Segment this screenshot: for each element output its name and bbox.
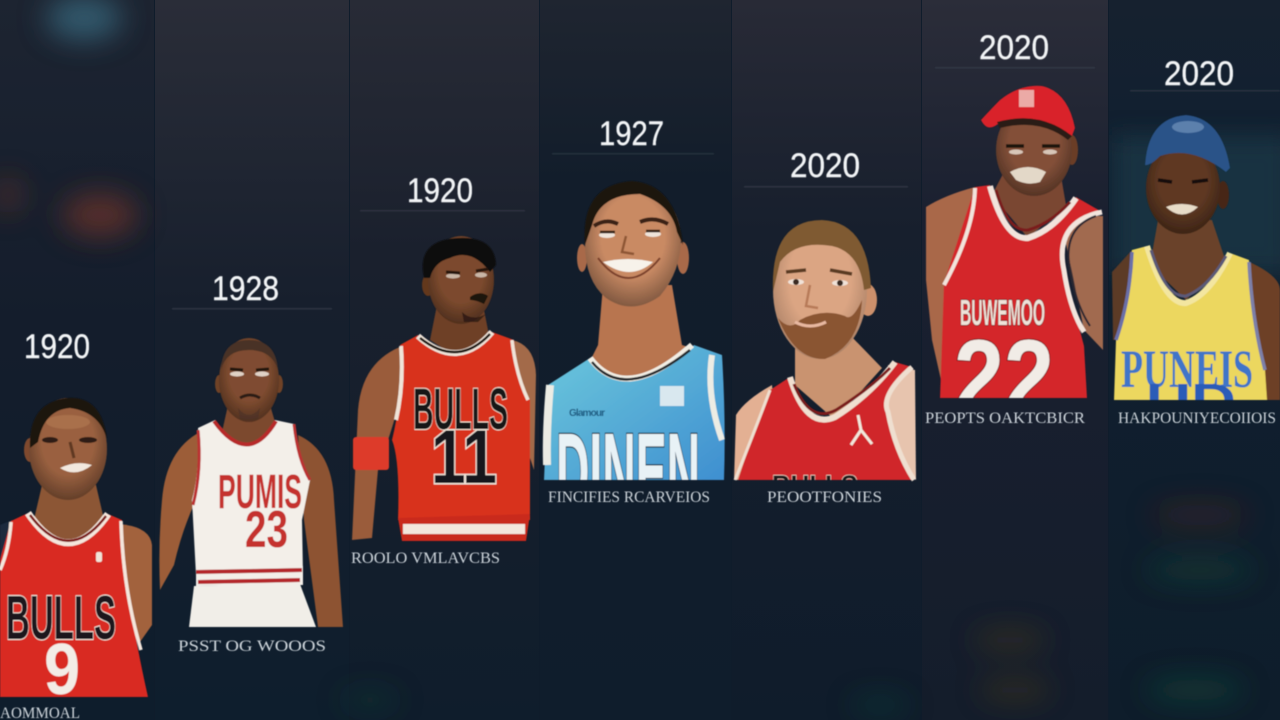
column 3: player in Bulls jersey and wristband: [351, 172, 536, 567]
name caption: PEOPTS OAKTCBICR: [925, 410, 1085, 427]
figure: 11: [431, 415, 497, 500]
figure: BULLS: [772, 470, 858, 503]
column 1: player in red jersey: [0, 328, 152, 720]
year label 2020: 2020: [979, 29, 1049, 67]
divider under year: [172, 308, 332, 310]
column 2: player in white jersey: [159, 270, 343, 655]
figure: [1112, 115, 1280, 426]
year label 1920: 1920: [24, 328, 90, 366]
divider under year: [360, 210, 525, 212]
column 7: player in blue cap and yellow jersey: [1112, 55, 1280, 427]
textured backdrop behind player seven: [1112, 135, 1280, 275]
figure: BULLS: [6, 584, 116, 653]
column 6: player in red cap and number 22 jersey: [925, 29, 1103, 435]
figure: PUMIS: [218, 466, 302, 519]
year label 1920: 1920: [407, 172, 473, 210]
column 4: smiling player in blue jersey: [544, 115, 725, 534]
figure: 9: [44, 630, 80, 710]
figure: BULLS: [413, 377, 508, 442]
year label 1927: 1927: [599, 115, 664, 153]
name caption: HAKPOUNIYECOIIOIS: [1118, 410, 1276, 427]
name caption: FINCIFIES RCARVEIOS: [548, 489, 710, 506]
divider under year: [935, 67, 1095, 68]
divider under year: [1130, 90, 1280, 92]
text: DINEN: [556, 411, 700, 534]
figure: [926, 86, 1103, 435]
name caption: PSST OG WOOOS: [178, 638, 326, 655]
year label 2020: 2020: [1164, 55, 1234, 93]
figure: [0, 398, 152, 710]
figure: [734, 220, 916, 503]
figure: 22: [954, 319, 1054, 435]
name caption: ROOLO VMLAVCBS: [351, 550, 500, 567]
figure: [352, 236, 536, 541]
figure: [542, 180, 726, 481]
year label 1928: 1928: [212, 270, 279, 308]
divider under year: [744, 186, 908, 188]
figure: BUWEMOO: [960, 292, 1045, 333]
name caption: PEOOTFONIES: [767, 489, 882, 506]
figure: Glamour: [569, 408, 605, 419]
column 5: bearded player in red jersey: [734, 147, 916, 506]
year label 2020: 2020: [790, 147, 860, 185]
divider under year: [552, 153, 714, 154]
figure: 23: [245, 501, 288, 559]
figure: [159, 338, 343, 627]
figure: UD: [1146, 374, 1236, 426]
